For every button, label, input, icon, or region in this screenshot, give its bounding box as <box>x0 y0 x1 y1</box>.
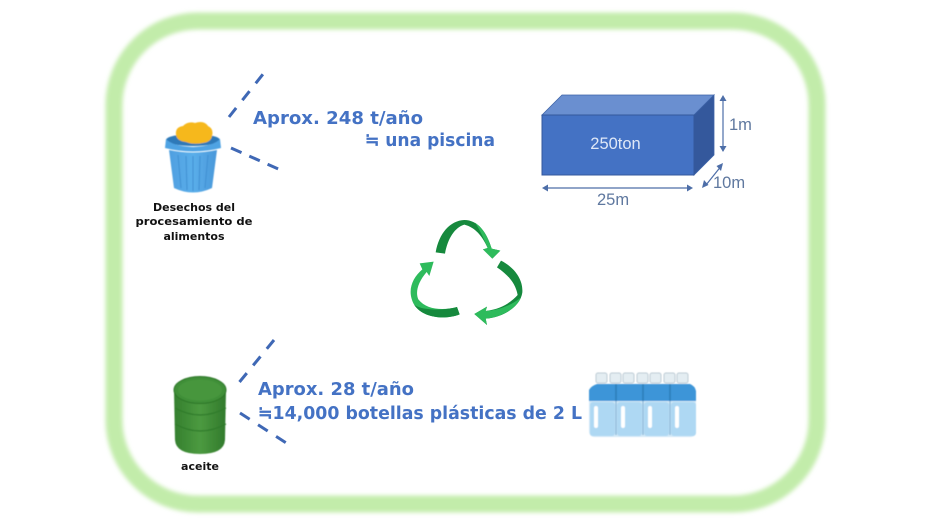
label: food processing waste <box>136 201 252 243</box>
label: food processing waste: procesamiento de <box>136 215 252 228</box>
label: food processing waste: alimentos <box>163 230 225 243</box>
icon: waste bucket <box>165 122 221 192</box>
label: oil: aceite <box>181 460 219 473</box>
dimension arrows and labels: 1m <box>729 116 752 134</box>
text: annual waste amount <box>253 108 495 152</box>
dimension arrows and labels <box>542 95 752 209</box>
right arrow <box>474 261 522 325</box>
icon: oil drum <box>174 376 226 454</box>
text: annual oil amount <box>258 379 582 425</box>
block label: 250ton <box>590 135 641 153</box>
label: food processing waste: Desechos del <box>153 201 235 214</box>
text: annual waste amount: Aprox. 248 t/año <box>253 108 423 129</box>
left arrow <box>411 262 460 317</box>
icon: recycling arrows <box>411 220 522 325</box>
text: annual oil amount: ≒14,000 botellas plásticas de 2 L <box>258 399 582 425</box>
dimension arrows and labels: 25m <box>597 191 629 209</box>
icon: plastic bottles <box>589 373 696 437</box>
text: annual waste amount: ≒ una piscina <box>365 126 495 152</box>
top arrow <box>436 220 500 259</box>
dimension arrows and labels: 10m <box>713 174 745 192</box>
dashed callout lines: waste <box>229 74 280 170</box>
waste pile <box>176 122 212 144</box>
dashed callout lines: oil <box>240 340 287 444</box>
green rounded frame <box>114 21 817 504</box>
text: annual oil amount: Aprox. 28 t/año <box>258 379 414 400</box>
icon: pool volume block <box>542 95 714 175</box>
